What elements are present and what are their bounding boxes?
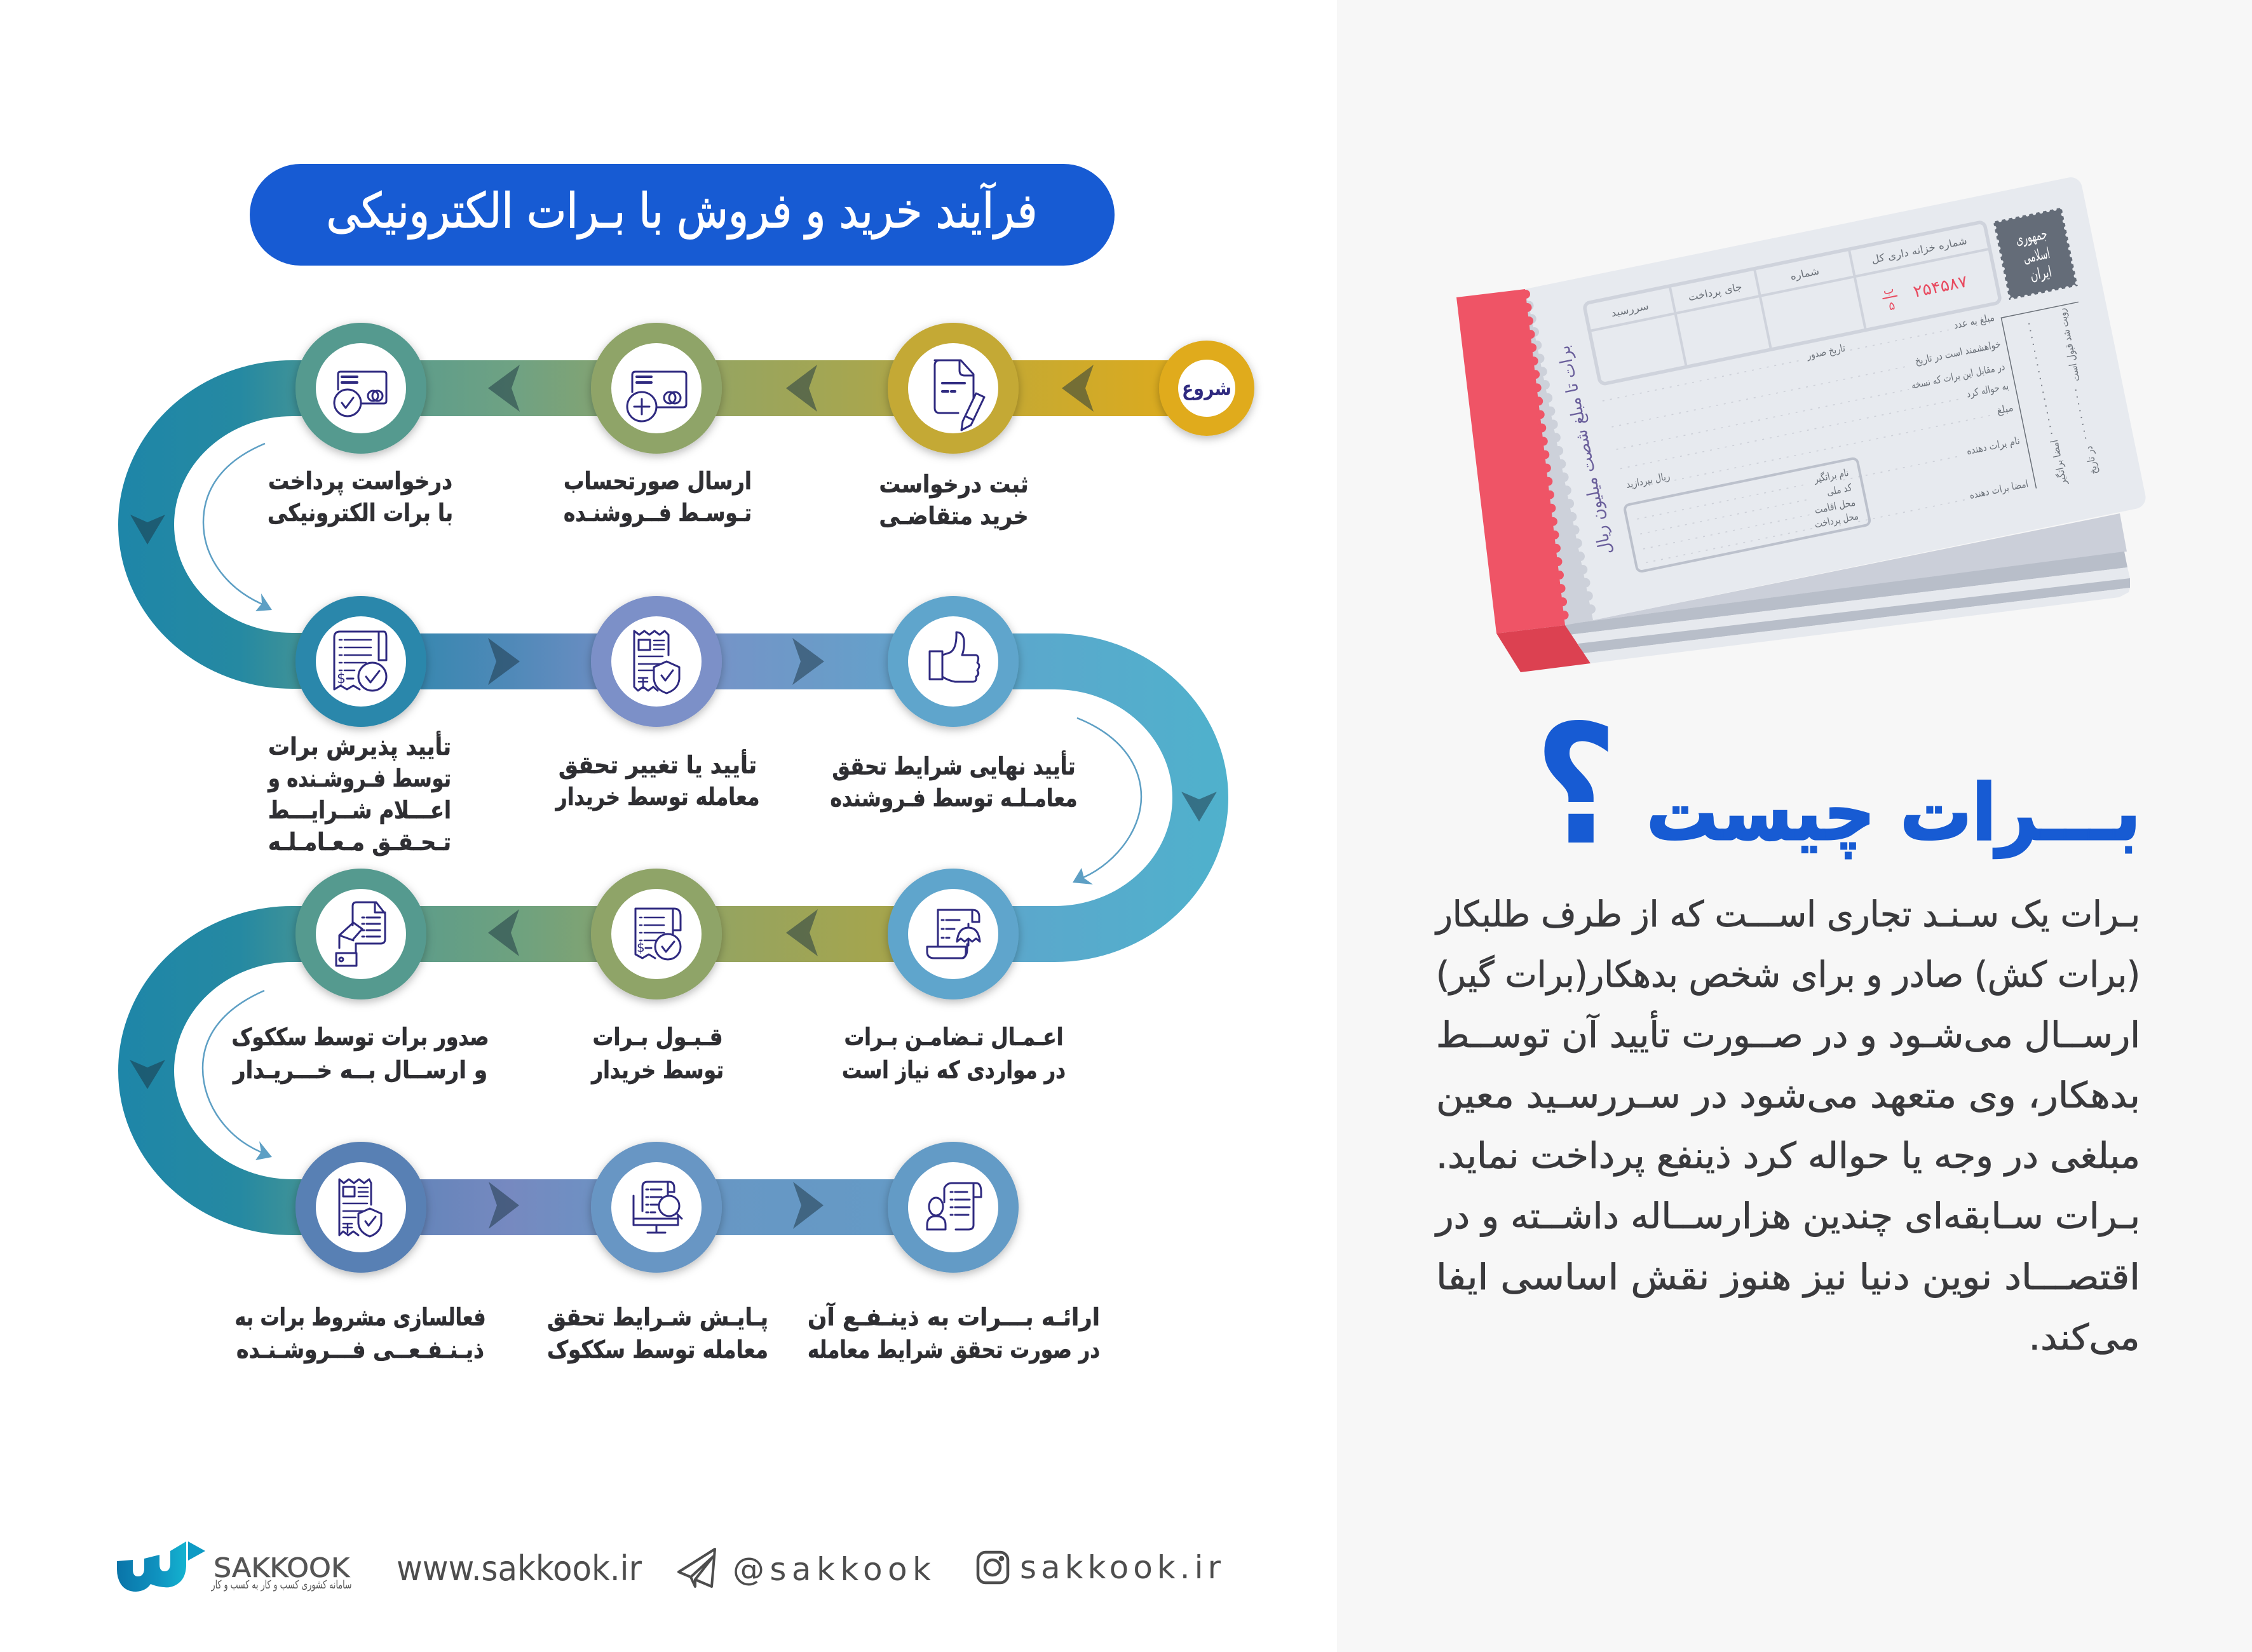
table of note fields: شماره خزانه داری کل [1870,234,1968,266]
step 8 node: invoice with check icon [591,869,722,999]
promissory note illustration [1456,175,2148,672]
step labels: توسط فـروشـنده و [267,764,451,793]
table of note fields: سررسید [1610,300,1650,320]
body paragraph: بـرات یک سـنـد تجاری اســـت که از طرف طلبکار [1434,894,2140,935]
step labels: در صورت تحقق شرایط معامله [808,1336,1100,1364]
table of note fields: ۵ [1887,299,1896,313]
vertical amount text: برات تا مبلغ شصت میلیون ریال [1554,344,1616,556]
heading: what is a promissory note [1535,690,2141,882]
step labels: اعـمـال تـضامـن بـرات [844,1023,1064,1051]
body paragraph: ارســال می‌شـود و در صــورت تأیید آن توســط [1436,1010,2140,1056]
stamp: ایران [2028,262,2053,284]
start circle [1159,341,1254,436]
step labels: پـایـش شـرایط تحقق [547,1303,768,1331]
body paragraph: بـرات سـابقه‌ای چندین هزارســاله داشــته و در [1434,1196,2140,1237]
instagram handle: sakkook.ir [1020,1549,1221,1586]
title pill: فرآیند خرید و فروش با بـرات الکترونیکی [327,182,1037,240]
title pill [250,164,1115,266]
note field labels with dotted lines: امضا برات دهنده [1969,477,2030,502]
telegram handle: @sakkook [733,1551,931,1588]
note field labels with dotted lines: مبلغ [1996,402,2014,417]
step labels: تـحـقـق مـعـامـلـه [268,828,451,856]
step 8 node: invoice with check icon: $ [637,940,645,955]
signature rule and vertical labels [2001,302,2114,491]
drawer details box: نام براتگیر [1812,466,1850,486]
stamp: اسلامی [2021,244,2051,267]
footer logo: سامانه کشوری کسب و کار به کسب و کار [211,1578,352,1592]
step labels: تأیید نهایی شرایط تحقق [832,750,1075,780]
footer logo: SAKKOOK [214,1552,351,1583]
body paragraph: می‌کند. [2028,1317,2140,1358]
step labels: تأیید یا تغییر تحقق [559,749,757,779]
step 1 node: document and pencil icon [888,323,1019,454]
step labels: ذیـنـفـعــی فـــروشـنـده [236,1336,484,1364]
note field labels with dotted lines: ریال بپردازید [1625,470,1671,491]
table of note fields: ۲۵۴۵۸۷ [1912,272,1969,302]
note field labels with dotted lines: نام برات دهنده [1965,435,2021,457]
red binding [1456,289,1591,672]
step labels: معامـلـه توسط فـروشنده [830,784,1078,813]
step 6 node: invoice with check icon [295,596,426,727]
body paragraph: بدهکار، وی متعهد می‌شود در سـررسـید معین [1436,1075,2140,1116]
step 3 node: card with check icon [295,323,426,454]
icon: telegram paper plane [679,1549,715,1587]
note field labels with dotted lines: در مقابل این برات که نسخه [1910,360,2006,392]
step labels: با برات الکترونیکی [268,499,453,527]
table of note fields: جای پرداخت [1687,281,1743,304]
table of note fields: ب [1882,283,1895,298]
step 9 node: hand holding document icon [295,869,426,999]
step labels: قـبـول بـرات [592,1023,723,1051]
note field labels with dotted lines: به حواله کرد [1965,379,2010,400]
step labels: فعالسازی مشروط برات به [235,1303,485,1332]
lower pages of the note pad [1564,513,2130,663]
step labels: صدور برات توسط سککوک [231,1023,489,1052]
note field labels with dotted lines [1601,311,2030,571]
process flow ribbon [146,388,1209,1207]
step 4 node: thumbs up icon [888,596,1019,727]
step 12 node: receipt with shield icon [295,1142,426,1273]
footer logo [117,1541,352,1592]
perforated stub edge [1525,292,1593,625]
step labels: درخواست پرداخت [268,467,452,495]
stamp [1993,208,2078,300]
heading: what is a promissory note: ؟ [1535,690,1617,882]
body paragraph: مبلغی در وجه یا حواله کرد ذینفع پرداخت نماید. [1436,1135,2140,1177]
drawer details box: محل پرداخت [1814,510,1859,531]
start circle: شروع [1182,376,1231,400]
step labels: خرید متقاضـی [879,502,1028,530]
direction chevrons [130,365,1217,1229]
drawer details box: کد ملی [1826,481,1853,498]
note field labels with dotted lines: خواهشمند است در تاریخ [1914,338,2002,368]
heading: what is a promissory note: بـــرات چیست [1646,768,2141,858]
stamp: جمهوری [2014,224,2049,248]
step labels: تأیید پذیرش برات [268,731,451,761]
step 2 node: card with plus icon [591,323,722,454]
step 10 node: person with scroll icon [888,1142,1019,1273]
step 11 node: monitor with magnifier icon [591,1142,722,1273]
step 6 node: invoice with check icon: $ [337,671,346,687]
icon: instagram [978,1552,1008,1583]
note field labels with dotted lines: تاریخ صدور [1805,342,1846,362]
body paragraph [1434,894,2140,1358]
table of note fields [1584,222,2000,384]
step labels: معامله توسط خریدار [555,783,760,811]
note field labels with dotted lines: مبلغ به عدد [1953,311,1996,332]
step labels: توسط خریدار [590,1056,724,1084]
signature rule and vertical labels: امضا براتگیر [2048,438,2070,487]
signature rule and vertical labels: در تاریخ [2082,445,2101,475]
step labels: معامله توسط سککوک [547,1336,768,1364]
step labels: ارسال صورتحساب [564,467,752,495]
right panel background [1337,0,2252,1652]
top sheet of the note [1525,175,2148,620]
body paragraph: اقتصـــاد نوین دنیا نیز هنوز نقش اساسی ایفا [1436,1257,2140,1298]
signature rule and vertical labels: رویت شد قبول است [2056,307,2083,383]
drawer details box [1624,457,1871,572]
step labels: اعـــلام شــرایـــط [268,796,451,825]
step 5 node: receipt with shield icon [591,596,722,727]
drawer details box: محل اقامت [1814,496,1856,516]
step labels: و ارســال بــه خـــریـدار [232,1056,487,1085]
website address: www.sakkook.ir [397,1548,642,1588]
body paragraph: (برات کش) صادر و برای شخص بدهکار(برات گیر) [1436,954,2140,996]
step 7 node: document with umbrella icon [888,869,1019,999]
step labels: ثبت درخواست [879,470,1028,498]
step labels: ارائـه بـــرات به ذینـفـع آن [808,1302,1100,1331]
logo mark [117,1541,205,1592]
table of note fields: شماره [1789,265,1821,283]
step labels: تـوسـط فــروشنـده [564,499,752,527]
step labels [231,467,1100,1364]
step labels: در مواردی که نیاز است [842,1056,1066,1084]
thin curved arrows [203,443,1141,1160]
